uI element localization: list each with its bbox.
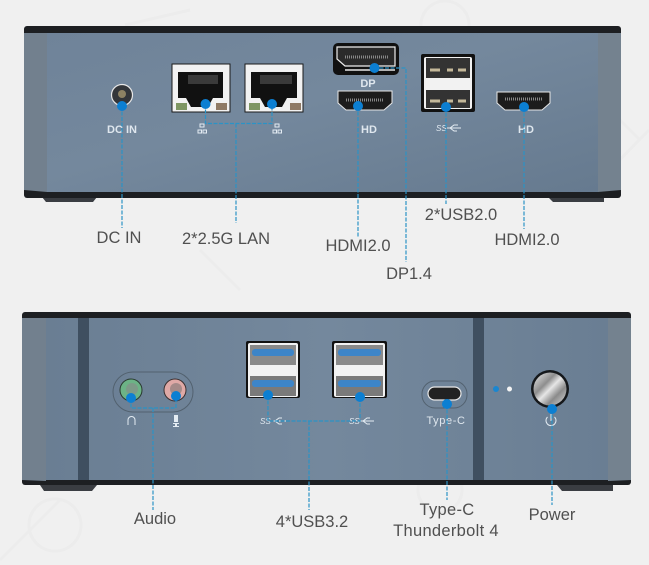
HD print right: HD: [518, 124, 534, 136]
device: front panel: [22, 312, 631, 540]
callout dots rear: [117, 63, 529, 112]
front labels: Power: [529, 506, 576, 524]
Type-C port: [422, 381, 467, 408]
LAN port 2: [245, 64, 303, 112]
front right cap: [608, 318, 631, 481]
LEDs: [493, 386, 512, 392]
front left cap: [22, 318, 46, 481]
DP print: DP: [360, 78, 376, 90]
device: rear panel: [24, 26, 621, 283]
audio pill: [113, 372, 193, 412]
front seams: [78, 318, 484, 480]
rear labels: 2*2.5G LAN: [182, 230, 270, 248]
rear labels: HDMI2.0: [494, 231, 560, 249]
HDMI port left: [338, 91, 392, 110]
mic icon: [173, 415, 179, 427]
front labels: [134, 501, 576, 540]
rear labels: 2*USB2.0: [425, 206, 497, 224]
LAN icons: [198, 124, 282, 133]
DisplayPort: [333, 43, 399, 75]
SS USB icon: SS: [436, 124, 447, 133]
front face: [46, 318, 608, 480]
USB2 port: [421, 54, 475, 112]
headphone jack: [120, 379, 142, 401]
callout dots front: [126, 390, 557, 414]
SS USB icon: [436, 124, 461, 133]
power icon: [546, 414, 556, 426]
HDMI port right: [497, 92, 550, 110]
LAN port 1: [172, 64, 230, 112]
front labels: Thunderbolt 4: [393, 522, 499, 540]
front feet: [40, 485, 613, 491]
DC IN print: DC IN: [107, 124, 137, 136]
rear labels: HDMI2.0: [325, 237, 391, 255]
Type-C print: Type-C: [426, 415, 466, 427]
SS USB icons: SS: [349, 417, 360, 426]
front labels: Type-C: [420, 501, 474, 519]
HD print left: HD: [361, 124, 377, 136]
front body: [22, 312, 631, 485]
rear labels: [97, 206, 560, 283]
SS USB icons: SS: [260, 417, 271, 426]
rear body: [24, 26, 621, 198]
callout lines front: [131, 395, 552, 510]
SS USB icons: [260, 417, 374, 426]
mic jack: [164, 379, 186, 401]
rear right cap: [598, 33, 621, 192]
power button: [531, 370, 569, 408]
USB3 port 2: [332, 341, 387, 398]
rear face: [47, 33, 598, 192]
headphone icon: [128, 417, 135, 425]
rear labels: DP1.4: [386, 265, 432, 283]
DC jack: [112, 84, 132, 106]
USB3 port 1: [246, 341, 300, 398]
rear labels: DC IN: [97, 229, 141, 247]
front labels: 4*USB3.2: [276, 513, 348, 531]
front labels: Audio: [134, 510, 176, 528]
callout lines rear: [122, 68, 524, 262]
rear left cap: [24, 33, 47, 192]
rear feet: [42, 197, 604, 202]
